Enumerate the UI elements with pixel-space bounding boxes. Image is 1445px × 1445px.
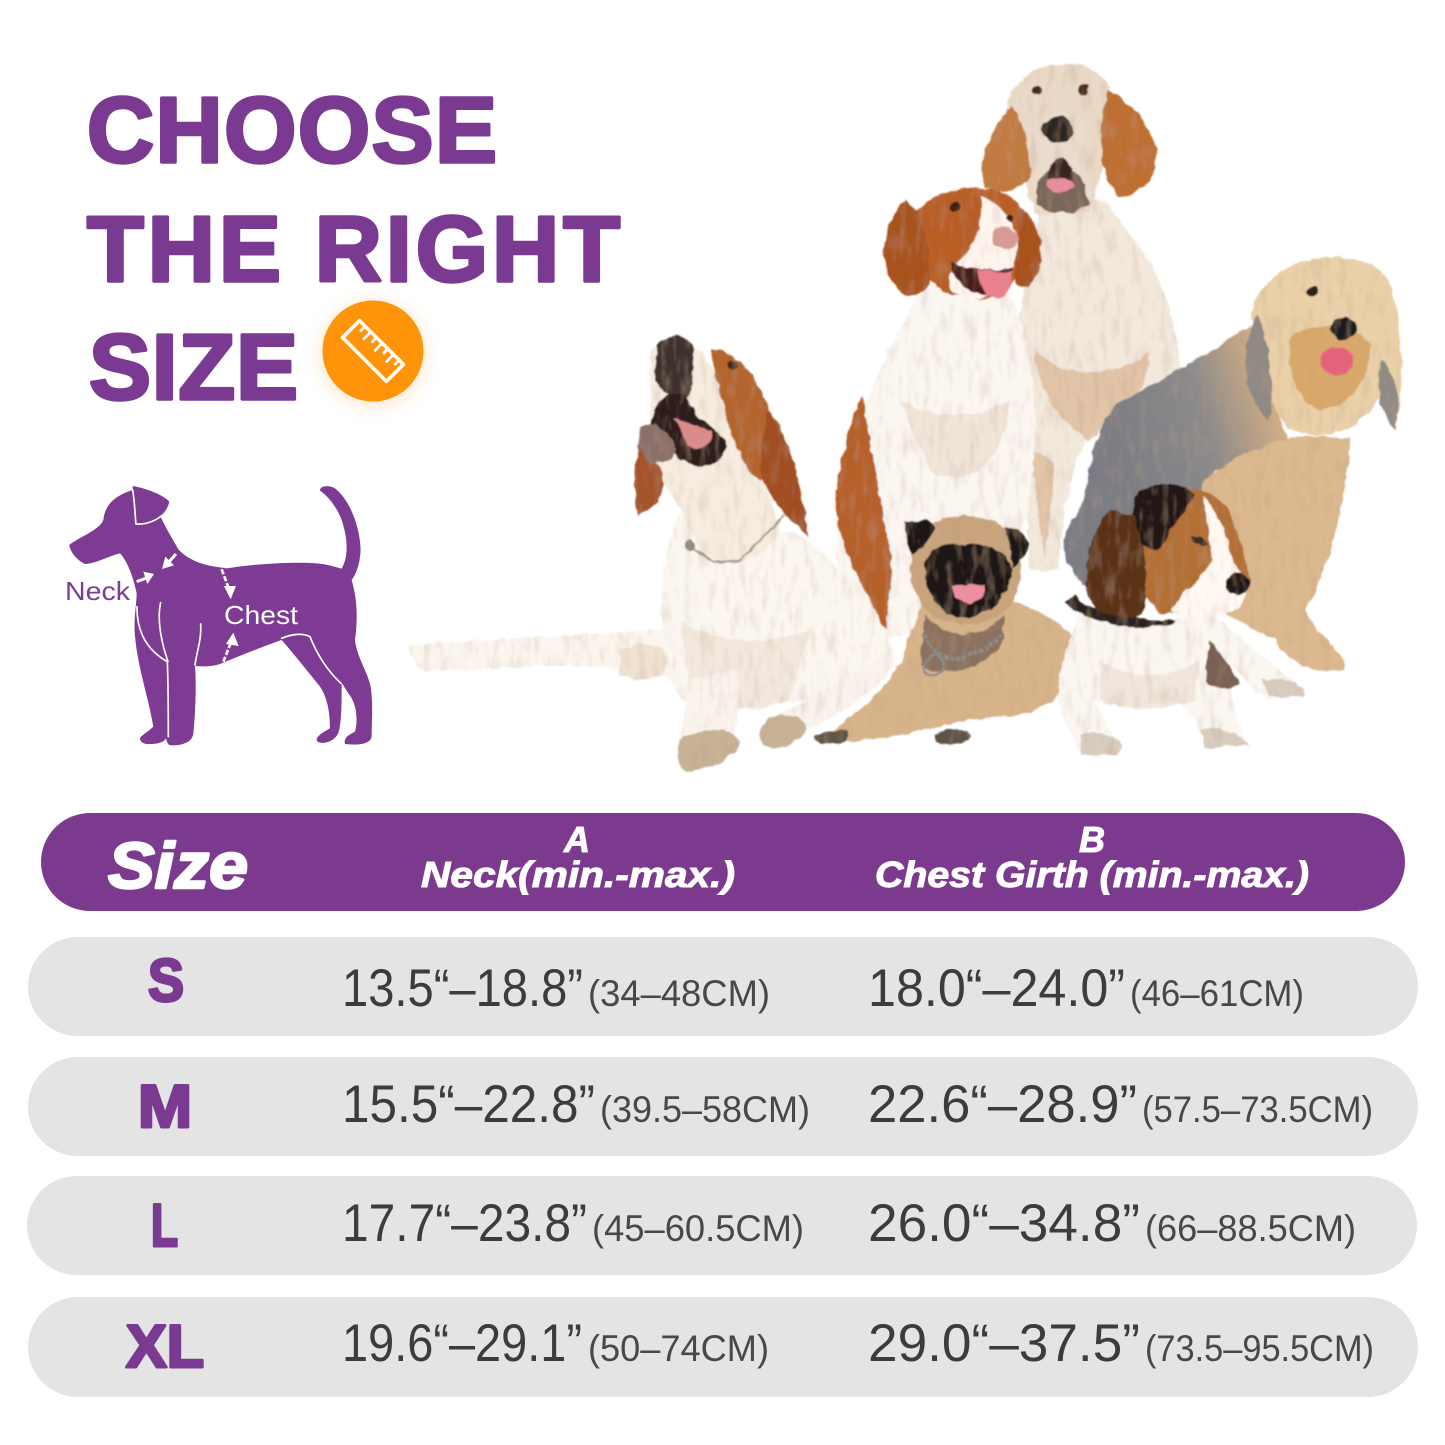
row: size S: 13.5“–18.8” <box>342 959 583 1018</box>
row: size XL <box>28 1297 1418 1397</box>
row: size XL: (50–74CM) <box>588 1328 769 1369</box>
row: size S: (46–61CM) <box>1130 973 1304 1014</box>
row: size XL: 29.0“–37.5” <box>868 1314 1140 1373</box>
row: size M: M <box>138 1073 192 1140</box>
row: size XL: XL <box>126 1313 204 1380</box>
dog: pug <box>815 516 1075 744</box>
dog group photo <box>410 64 1401 770</box>
body contour lines <box>133 490 341 737</box>
row: size XL: (73.5–95.5CM) <box>1145 1328 1374 1369</box>
dog: beagle <box>1058 484 1305 755</box>
size heading: Size <box>108 829 248 902</box>
row: size S: 18.0“–24.0” <box>868 959 1125 1018</box>
icon: dog measuring silhouette <box>69 486 372 745</box>
row: size M: 15.5“–22.8” <box>342 1075 595 1134</box>
row: size S <box>28 937 1418 1036</box>
dog: setter <box>982 64 1180 570</box>
row: size XL: 19.6“–29.1” <box>342 1314 582 1373</box>
row: size L: (66–88.5CM) <box>1145 1208 1356 1249</box>
row: size L: (45–60.5CM) <box>592 1208 804 1249</box>
icon: ruler badge <box>321 300 425 406</box>
table header <box>41 813 1405 911</box>
neck arrows <box>137 554 176 584</box>
neck label: Neck <box>65 576 131 606</box>
row: size L: L <box>151 1192 178 1259</box>
row: size M: 22.6“–28.9” <box>868 1075 1137 1134</box>
title: THE RIGHT <box>87 197 620 301</box>
row: size L: 26.0“–34.8” <box>868 1194 1140 1253</box>
chest heading <box>875 819 1309 895</box>
title: SIZE <box>89 315 298 419</box>
chest label: Chest <box>224 600 299 630</box>
row: size L <box>27 1176 1417 1275</box>
neck heading: A <box>563 819 590 860</box>
row: size M <box>28 1057 1418 1156</box>
row: size L: 17.7“–23.8” <box>342 1194 587 1253</box>
row: size M: (57.5–73.5CM) <box>1142 1089 1373 1130</box>
chest heading: Chest Girth (min.-max.) <box>875 854 1309 895</box>
title: CHOOSE <box>87 78 497 182</box>
dog: brittany <box>836 188 1041 637</box>
neck heading <box>421 819 735 895</box>
title <box>87 78 620 419</box>
dog body <box>69 486 372 745</box>
chest arrows <box>222 569 239 662</box>
chest heading: B <box>1079 819 1105 860</box>
dog: hound <box>410 336 895 770</box>
row: size S: S <box>148 947 184 1014</box>
dog: sheepdog <box>1064 257 1401 671</box>
row: size M: (39.5–58CM) <box>600 1089 810 1130</box>
row: size S: (34–48CM) <box>588 973 770 1014</box>
neck heading: Neck(min.-max.) <box>421 854 735 895</box>
